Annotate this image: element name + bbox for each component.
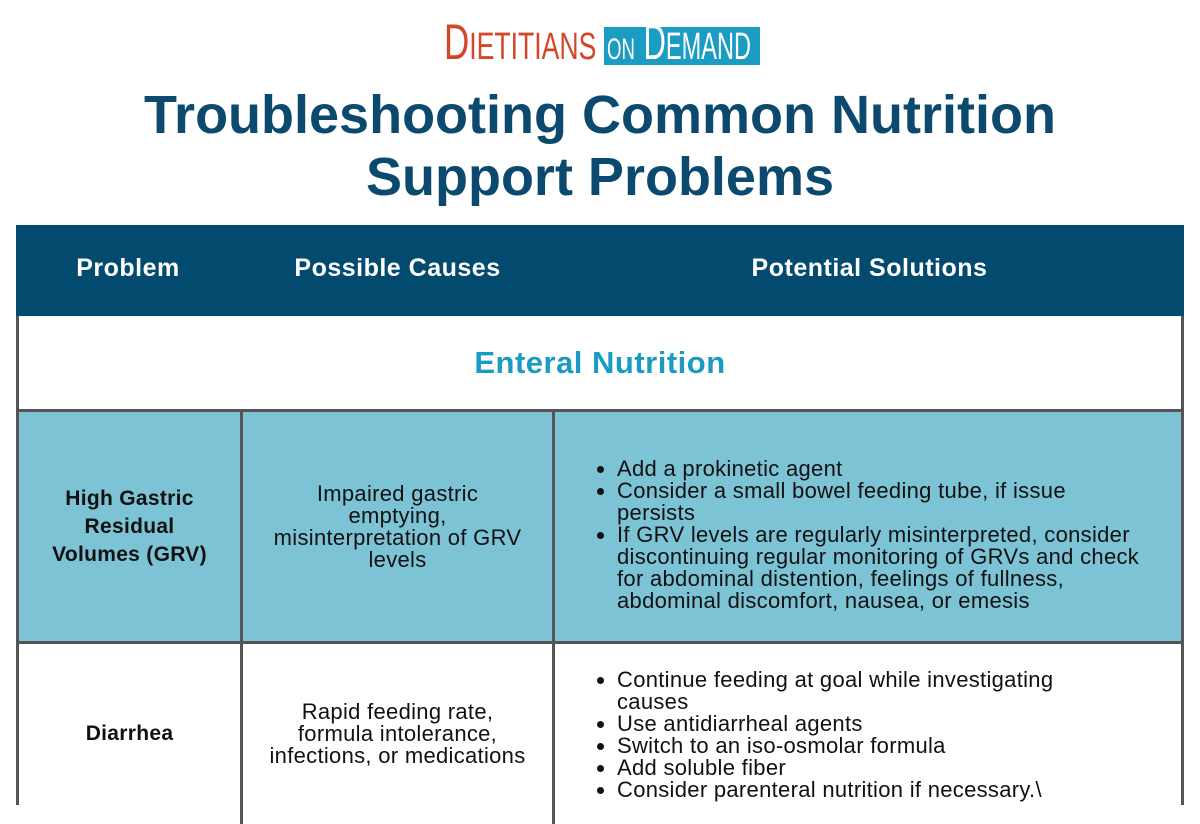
title: Troubleshooting Common Nutrition <box>144 85 1056 145</box>
row: Diarrhea: Use antidiarrheal agents <box>617 711 863 736</box>
title <box>144 85 1056 207</box>
section: Enteral Nutrition: Enteral Nutrition <box>474 344 726 380</box>
row: Diarrhea <box>86 644 1053 824</box>
header row <box>16 225 1184 316</box>
row: GRV <box>19 412 1181 644</box>
row: Diarrhea: Rapid feeding rate, formula intolerance, infections, or medications <box>269 699 526 768</box>
row: GRV: Consider a small bowel feeding tube, if issue persists <box>617 478 1066 525</box>
table <box>16 225 1184 805</box>
logo: ON DEMAND <box>607 14 751 70</box>
row: Diarrhea: Switch to an iso-osmolar formula <box>617 733 946 758</box>
title: Support Problems <box>366 147 834 207</box>
row: Diarrhea: Add soluble fiber <box>617 755 786 780</box>
row: GRV: Add a prokinetic agent <box>617 456 843 481</box>
row: Diarrhea: Consider parenteral nutrition if necessary.\ <box>617 777 1042 802</box>
row: Diarrhea: Continue feeding at goal while investigating causes <box>617 667 1053 714</box>
header row: Problem <box>76 254 180 282</box>
row: Diarrhea: Diarrhea <box>86 722 173 745</box>
row: GRV: Impaired gastric emptying, misinterpretation of GRV levels <box>274 480 521 572</box>
header row: Potential Solutions <box>752 254 987 282</box>
logo: DIETITIANS <box>444 14 596 70</box>
row: GRV: High Gastric <box>65 486 194 510</box>
section: Enteral Nutrition <box>19 316 1181 412</box>
logo <box>444 14 760 70</box>
row: GRV: Volumes (GRV) <box>52 542 207 566</box>
header row: Possible Causes <box>294 254 501 282</box>
row: GRV: If GRV levels are regularly misinterpreted, consider discontinuing regular monitoring of GRVs and check for abdominal distention, feelings of fullness, abdominal discomfort, nausea, or emesis <box>617 522 1139 613</box>
row: GRV: Residual <box>85 514 174 538</box>
